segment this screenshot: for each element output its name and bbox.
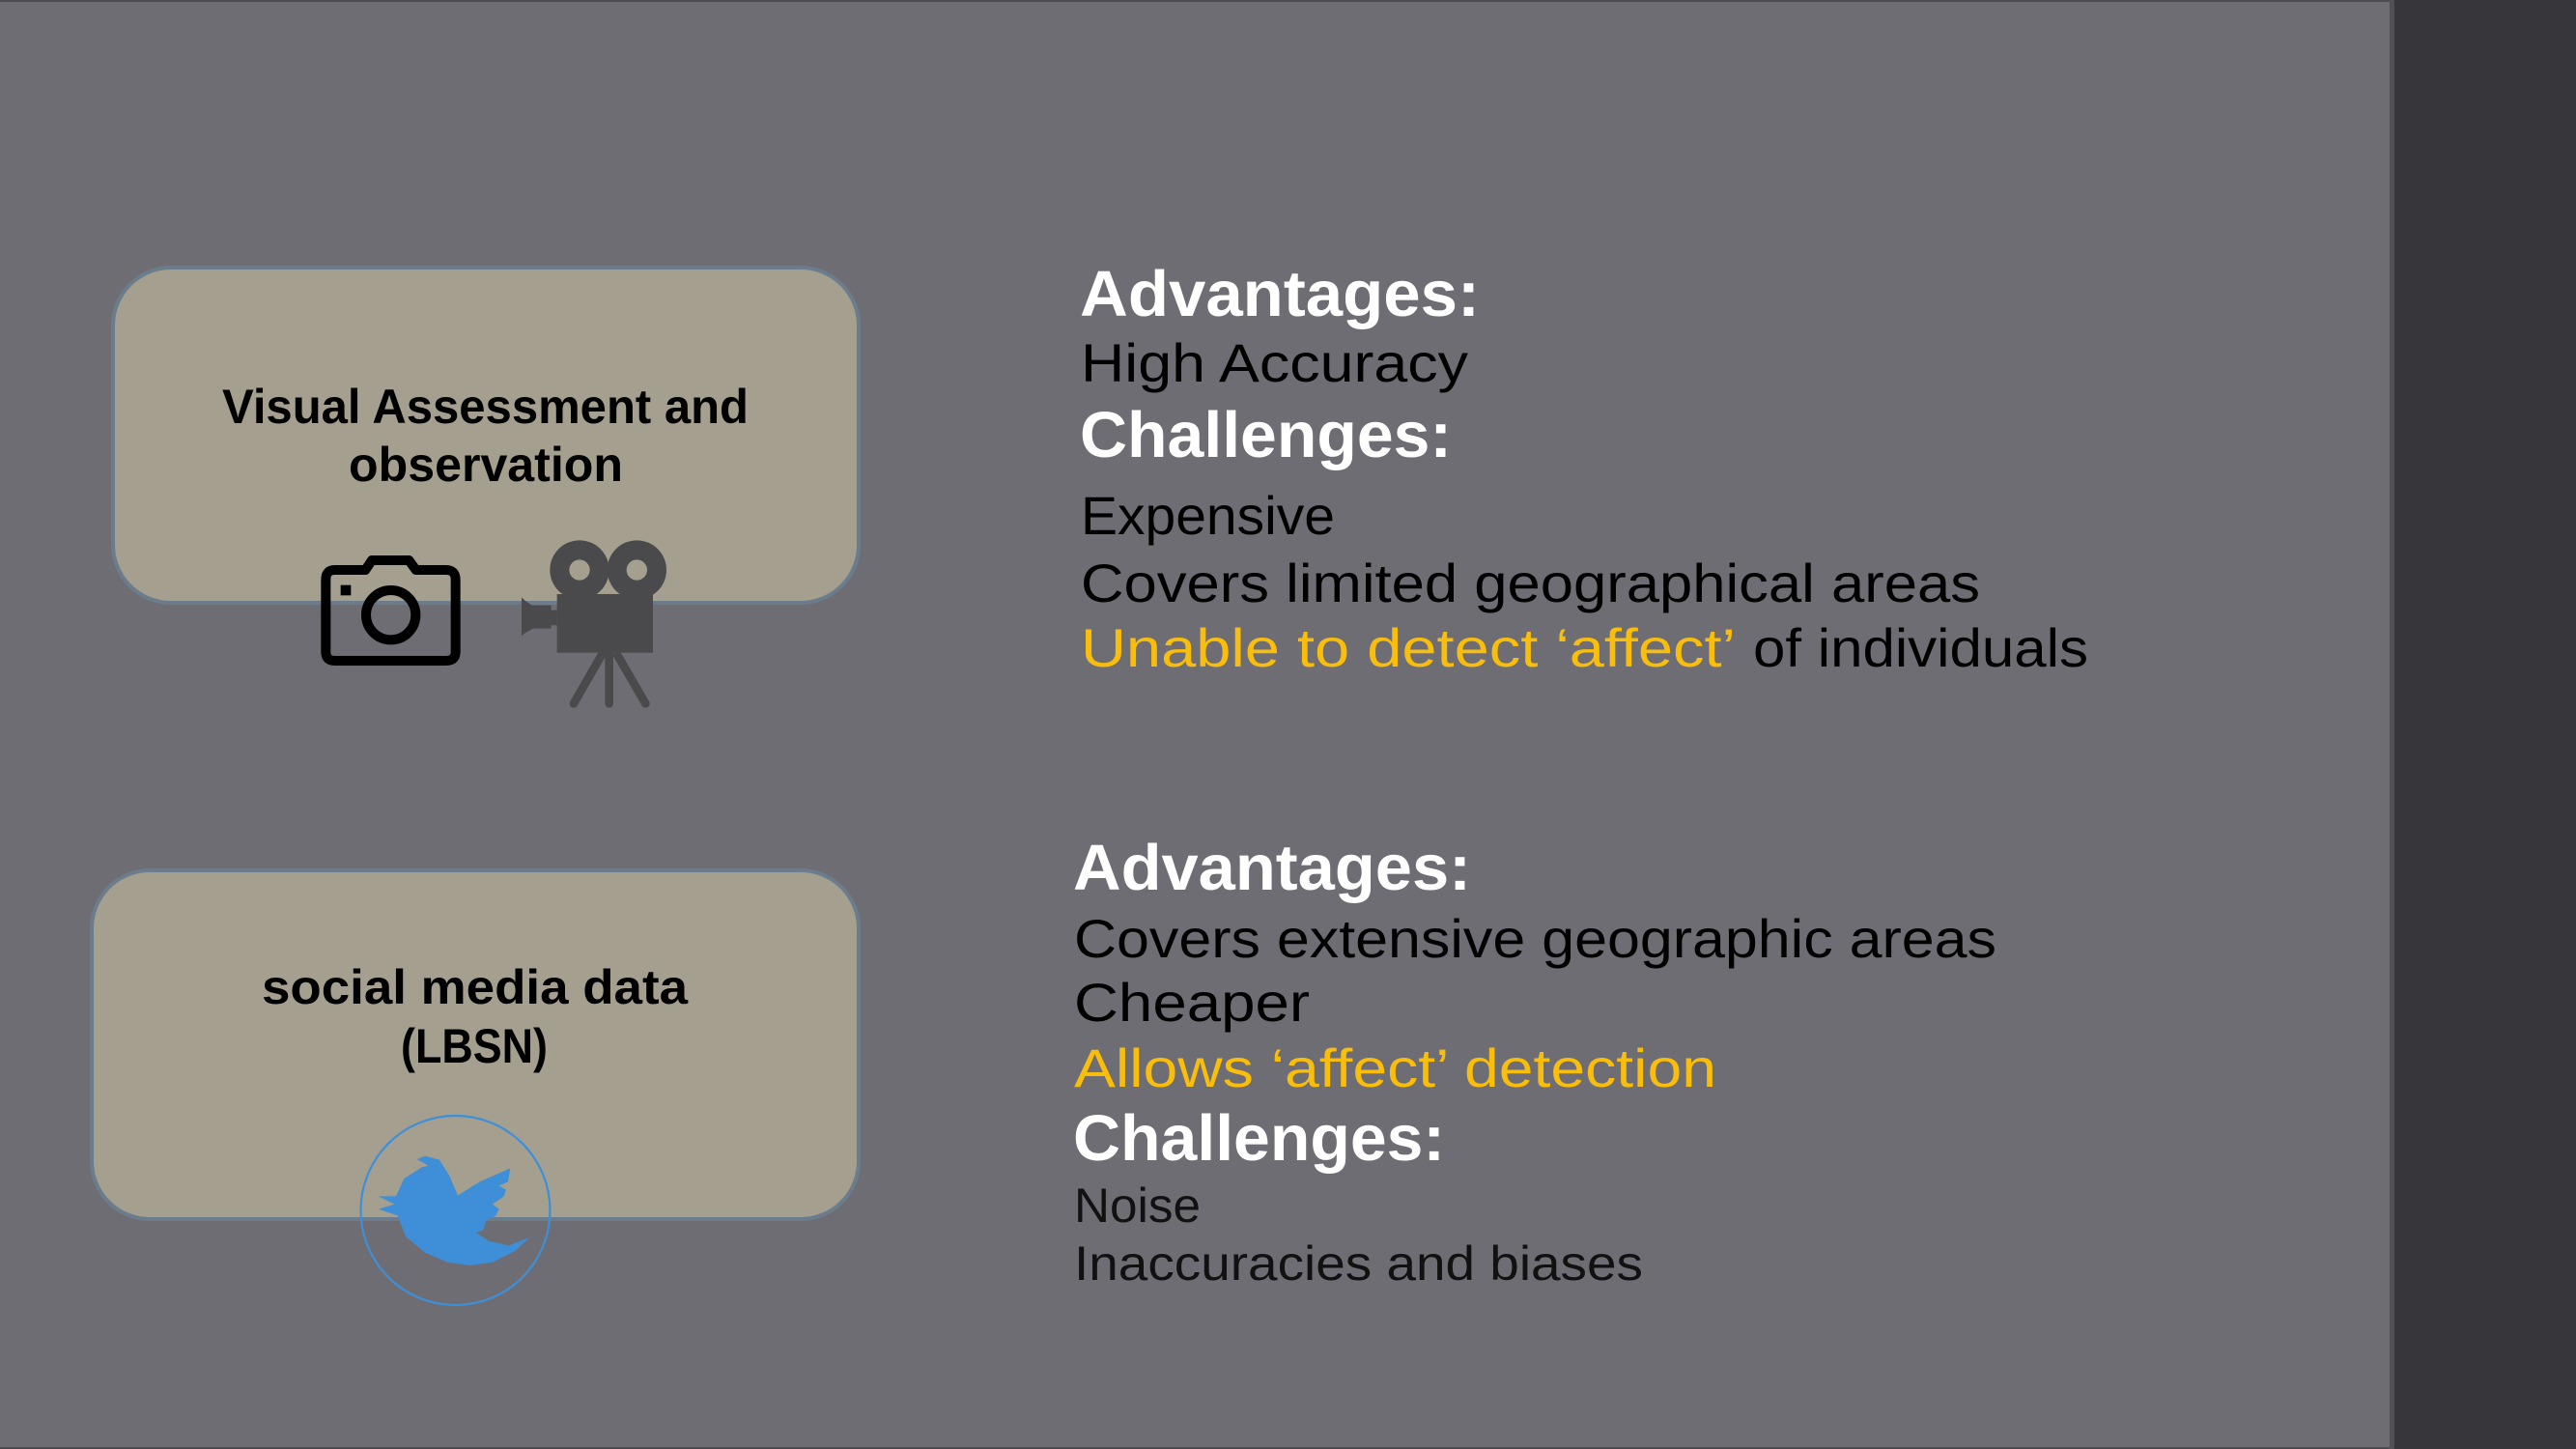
text block: visual assessment advantages and challenges: High Accuracy <box>1081 332 1468 393</box>
icon: film projector <box>522 540 666 703</box>
heading: visual assessment and observation: Visual Assessment and <box>222 380 749 434</box>
text block: visual assessment advantages and challenges: Advantages: <box>1080 258 1480 330</box>
text block: social media advantages and challenges: Inaccuracies and biases <box>1074 1236 1643 1291</box>
text block: visual assessment advantages and challenges: of individuals <box>1753 617 2088 678</box>
text block: social media advantages and challenges <box>1073 832 1996 1291</box>
panel: social media data <box>92 870 859 1219</box>
text block: visual assessment advantages and challenges: Expensive <box>1081 485 1335 546</box>
icon: twitter bird in circle <box>361 1116 551 1305</box>
text block: visual assessment advantages and challenges: Covers limited geographical areas <box>1081 553 1980 613</box>
text block: visual assessment advantages and challenges: Unable to detect ‘affect’ <box>1081 617 1736 678</box>
text block: social media advantages and challenges: Noise <box>1074 1179 1201 1233</box>
heading: social media data (LBSN): (LBSN) <box>401 1019 548 1073</box>
heading: visual assessment and observation <box>222 380 749 492</box>
heading: visual assessment and observation: observation <box>349 438 623 492</box>
text block: visual assessment advantages and challenges <box>1080 258 2088 678</box>
icon: camera <box>326 560 456 661</box>
text block: social media advantages and challenges: Challenges: <box>1073 1102 1445 1175</box>
text block: social media advantages and challenges: Cheaper <box>1074 972 1310 1033</box>
text block: social media advantages and challenges: Advantages: <box>1073 832 1471 904</box>
panel: visual assessment <box>113 268 859 603</box>
text block: social media advantages and challenges: Allows ‘affect’ detection <box>1074 1037 1716 1098</box>
heading: social media data (LBSN) <box>262 960 689 1073</box>
text block: visual assessment advantages and challenges: Challenges: <box>1080 399 1452 471</box>
text block: social media advantages and challenges: Covers extensive geographic areas <box>1074 908 1996 969</box>
heading: social media data (LBSN): social media data <box>262 960 689 1014</box>
